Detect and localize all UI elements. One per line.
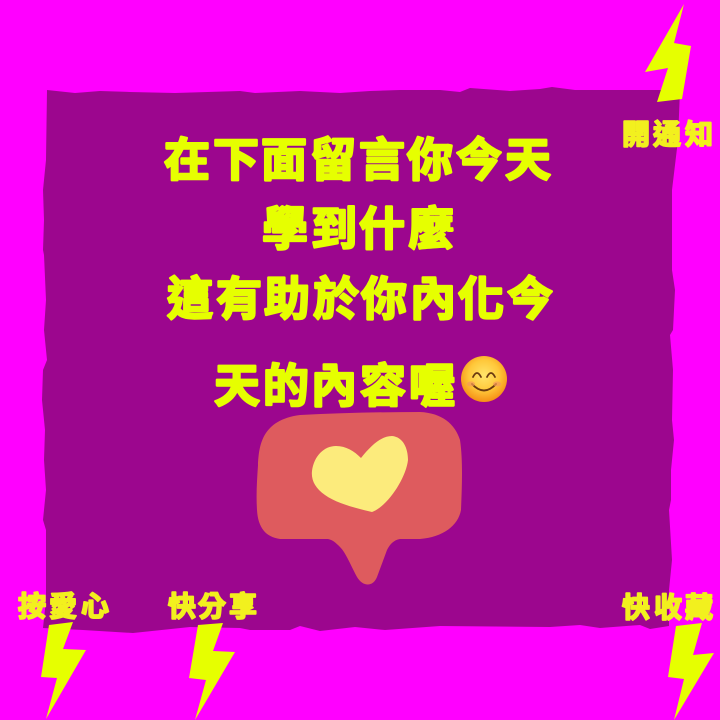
heading: main message <box>164 134 553 412</box>
label: save: 快收藏 <box>622 592 713 623</box>
icon: lightning bolt bottom centre <box>189 623 235 720</box>
speech bubble <box>257 412 462 584</box>
label: share: 快分享 <box>168 591 257 622</box>
icon: speech bubble with heart <box>257 412 462 584</box>
heart <box>312 436 408 512</box>
label: turn on notifications: 開通知 <box>622 119 713 150</box>
heading: main message: 這有助於你內化今 <box>167 273 553 325</box>
icon: lightning bolt bottom right <box>668 623 714 720</box>
heading: main message: 在下面留言你今天 <box>164 134 551 186</box>
label: press like: 按愛心 <box>18 591 109 622</box>
icon: lightning bolt top right <box>645 4 691 102</box>
icon: smiling face emoji <box>461 356 507 402</box>
icon: lightning bolt bottom left <box>41 622 86 719</box>
panel: purple torn-edge background <box>42 87 680 633</box>
heading: main message: 學到什麼 <box>262 203 454 255</box>
heading: main message: 天的內容喔 <box>214 360 455 412</box>
